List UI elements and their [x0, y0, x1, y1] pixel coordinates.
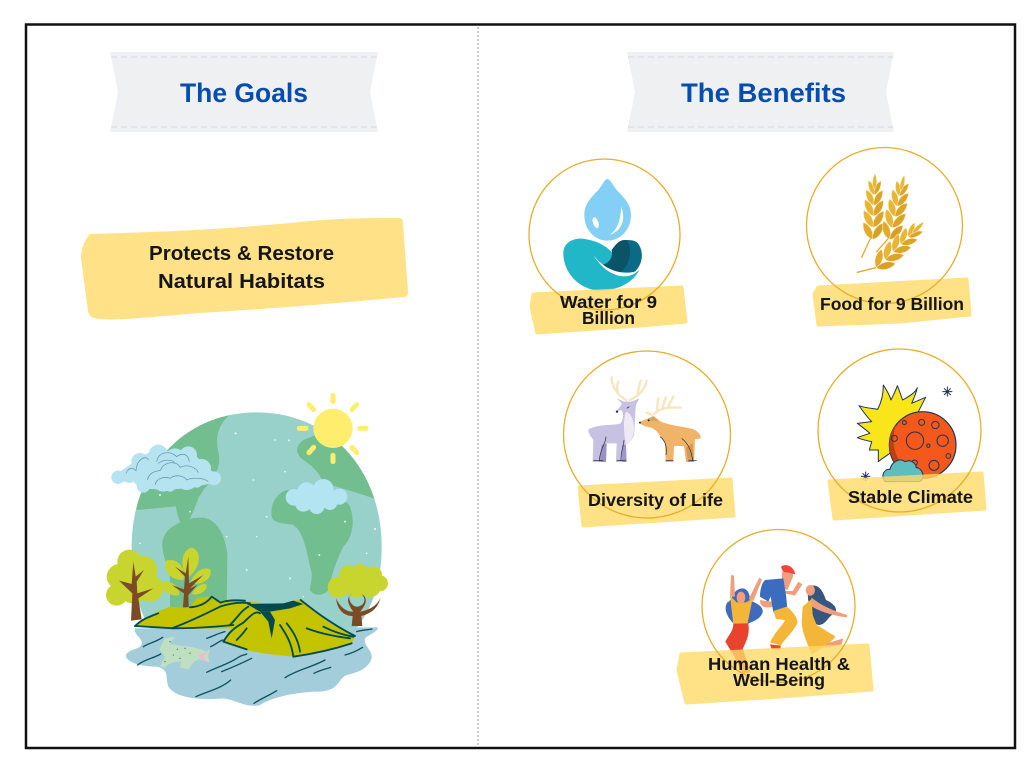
right cloud [286, 479, 347, 514]
benefit: food for 9 billion [806, 148, 970, 325]
label: diversity: Diversity of Life [588, 490, 723, 510]
crocodile [159, 637, 210, 669]
label: water: Water for 9 [560, 292, 657, 312]
heading ribbon: The Benefits: The Benefits [681, 78, 846, 108]
label: food: Food for 9 Billion [820, 294, 964, 314]
water pool [126, 627, 378, 706]
label: health [708, 654, 850, 690]
benefit: human health and well-being [678, 530, 872, 703]
label band: water [531, 287, 686, 333]
ring: climate [818, 349, 981, 512]
benefit: water for 9 billion [529, 159, 686, 333]
sun [299, 395, 366, 462]
heading ribbon: The Goals: The Goals [180, 78, 308, 108]
goal callout: Protects and Restore Natural Habitats: Natural Habitats [158, 270, 325, 293]
icon: sun, planet and cloud [857, 385, 956, 482]
icon: three dancers [725, 565, 847, 674]
ring: food [806, 148, 962, 304]
label band: food [814, 279, 970, 325]
heading ribbon: The Benefits [627, 52, 894, 132]
ring: diversity [564, 351, 730, 518]
label: health: Human Health & [708, 654, 850, 674]
left cloud [111, 445, 221, 493]
benefit: stable climate [818, 349, 985, 519]
label: climate: Stable Climate [848, 487, 973, 507]
dancer: middle [760, 565, 802, 649]
icon: wheat [857, 173, 931, 275]
middle tree [162, 548, 211, 615]
ring: water [529, 159, 680, 310]
benefit: diversity of life [564, 351, 734, 526]
dancer: right [802, 585, 847, 654]
label: water [560, 292, 657, 328]
mountains [135, 597, 355, 657]
left tree [106, 550, 163, 621]
heading ribbon: The Goals [110, 52, 378, 132]
goal callout: Protects and Restore Natural Habitats: Protects & Restore [149, 242, 334, 265]
label band: health [678, 645, 872, 703]
dancer: left [725, 575, 763, 674]
label band: diversity [579, 479, 734, 526]
earth habitat illustration [106, 395, 388, 706]
label band: climate [829, 473, 985, 519]
ring: health [702, 530, 855, 682]
goal callout: Protects and Restore Natural Habitats [81, 218, 408, 319]
label: water: Billion [582, 308, 635, 328]
icon: two deer [588, 377, 701, 462]
label: health: Well-Being [733, 670, 825, 690]
icon: water drop and hands [563, 179, 642, 291]
globe [132, 412, 382, 628]
right tree [328, 564, 388, 626]
